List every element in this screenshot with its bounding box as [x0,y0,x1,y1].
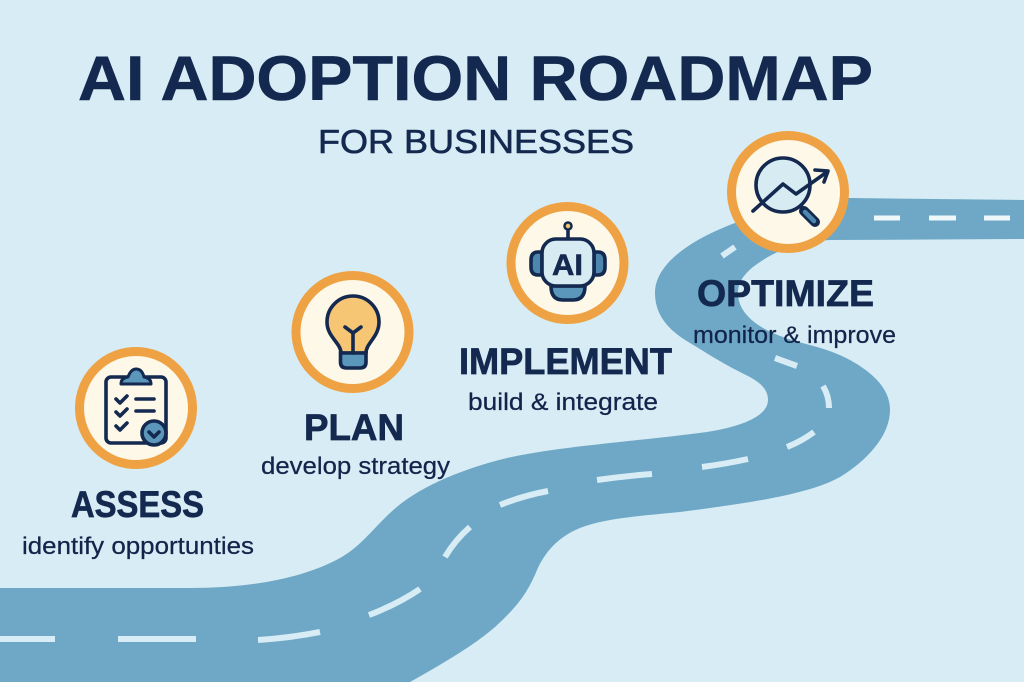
icon: growth chart magnifier badge [732,136,844,248]
description: assess: identify opportunties [22,533,254,560]
step: assess [22,352,254,560]
description: plan: develop strategy [261,453,450,480]
icon: AI robot badge [511,206,624,320]
icon: AI robot badge: AI [552,249,583,282]
subtitle: FOR BUSINESSES [318,123,634,160]
step: optimize [693,136,896,349]
step: implement [459,206,672,416]
icon: light bulb badge [296,276,409,388]
heading: assess: ASSESS [71,484,204,525]
description: optimize: monitor & improve [693,322,896,349]
winding road [0,198,1024,682]
description: implement: build & integrate [468,389,658,416]
heading: plan: PLAN [304,407,404,448]
step: plan [261,276,450,480]
title: AI ADOPTION ROADMAP [78,44,873,114]
icon: clipboard badge [80,352,192,464]
heading: optimize: OPTIMIZE [697,273,874,314]
heading: implement: IMPLEMENT [459,341,672,382]
